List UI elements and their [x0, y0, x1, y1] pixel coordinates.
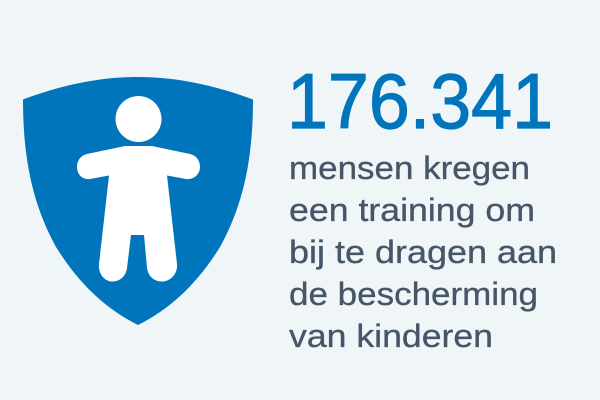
headline number: 176.341 [287, 57, 553, 145]
line 5: van kinderen [289, 318, 493, 354]
line 1: mensen kregen [289, 150, 530, 186]
line 3: bij te dragen aan [289, 234, 557, 270]
shield [23, 77, 253, 325]
description text [289, 150, 557, 354]
icon: shield with child [23, 77, 253, 325]
child figure [77, 96, 200, 282]
line 2: een training om [289, 192, 535, 228]
line 4: de bescherming [289, 276, 538, 312]
